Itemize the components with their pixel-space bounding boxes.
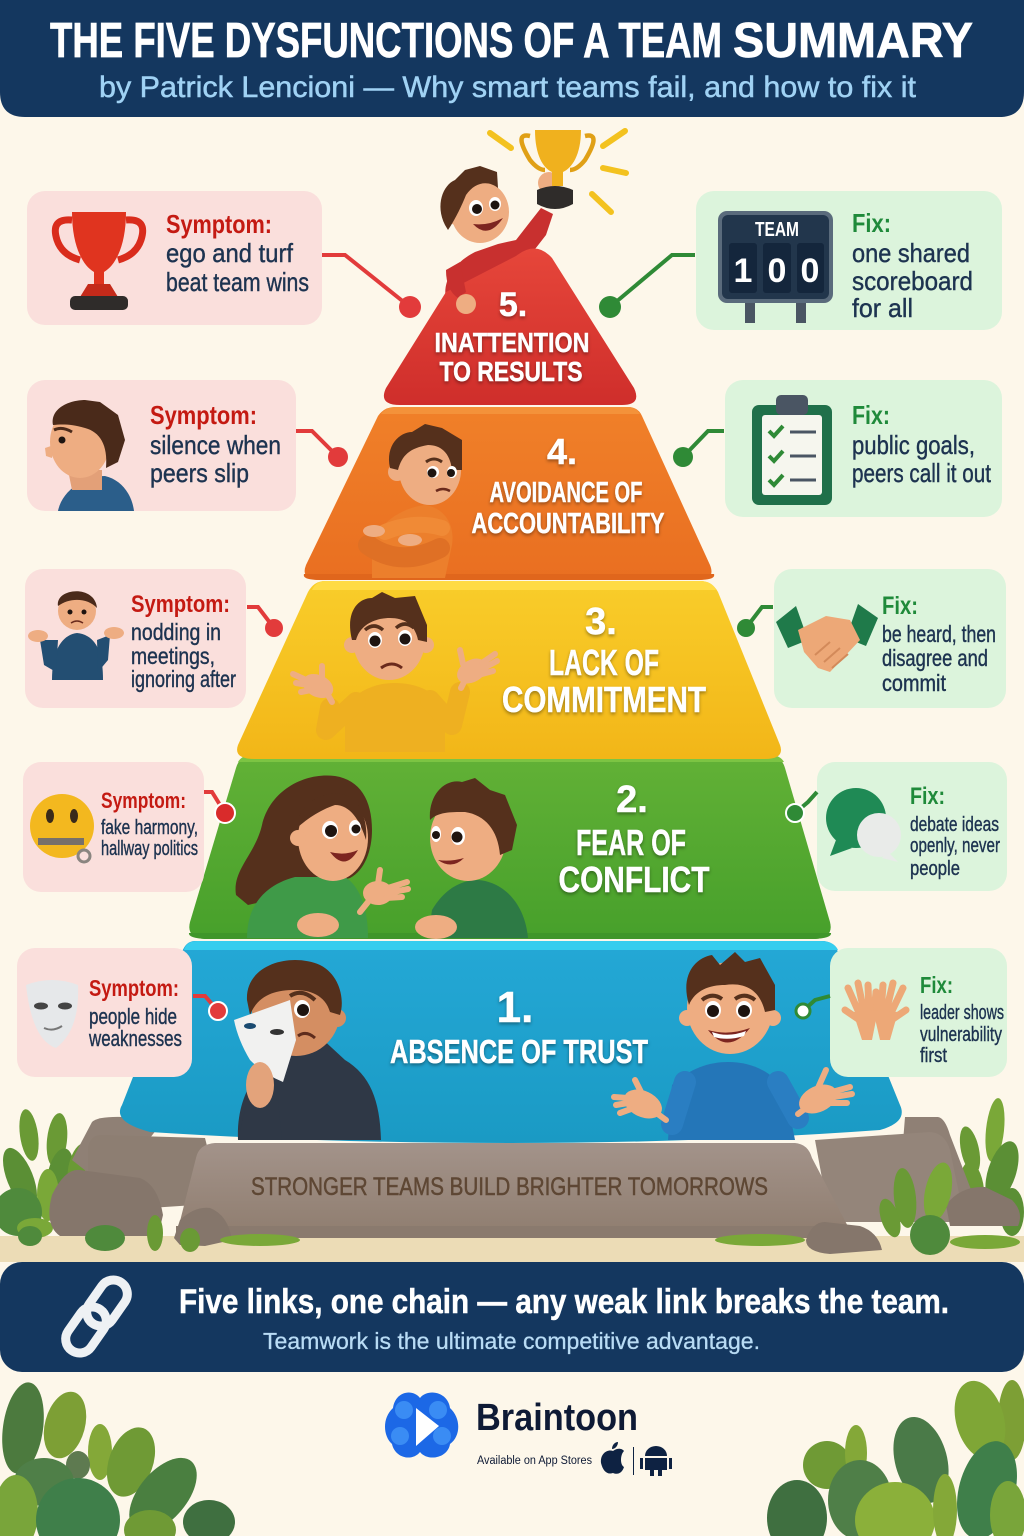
tier 1 label: 1.	[497, 983, 533, 1032]
icon: scoreboard	[718, 211, 833, 323]
pyramid tier 3: lack of commitment	[237, 581, 781, 759]
app stores note: Available on App Stores	[477, 1455, 592, 1467]
character with crossed arms	[363, 424, 462, 578]
symptom text: Symptom:	[150, 400, 257, 430]
ground and background foliage	[0, 1097, 1024, 1262]
symptom text: nodding in	[131, 619, 221, 645]
icon: gold trophy	[490, 130, 626, 212]
connector and dot	[599, 255, 695, 318]
tier 3 label: COMMITMENT	[502, 679, 706, 720]
icon: scoreboard: TEAM	[755, 219, 799, 241]
symptom text: Symptom:	[131, 591, 230, 618]
brand logo	[385, 1393, 672, 1476]
symptom text: Symptom:	[166, 209, 272, 239]
fix text: for all	[852, 293, 913, 323]
icon: scoreboard: 0	[768, 252, 786, 290]
fix text: Fix:	[910, 783, 945, 810]
symptom text: peers slip	[150, 458, 249, 488]
fix text: commit	[882, 670, 947, 696]
confused character shrugging	[293, 592, 497, 752]
icon: handshake	[776, 604, 878, 672]
tier 4 label: 4.	[547, 431, 577, 472]
character holding trophy on top	[440, 130, 626, 314]
tier 1 label	[390, 983, 648, 1070]
tier 4 label: AVOIDANCE OF	[490, 477, 642, 509]
fix text: Fix:	[920, 972, 953, 998]
title: THE FIVE DYSFUNCTIONS OF A TEAM	[50, 14, 722, 68]
fix text: disagree and	[882, 645, 988, 671]
symptom text: beat team wins	[166, 267, 309, 297]
connector and dot	[786, 792, 817, 822]
icon: red trophy	[55, 212, 143, 310]
tier 2 label: FEAR OF	[576, 822, 686, 863]
tier 3 label	[502, 601, 706, 720]
icon: zipper-mouth emoji	[30, 794, 94, 862]
fix text: public goals,	[852, 430, 975, 460]
icon: scoreboard: 1	[734, 252, 752, 290]
icon: apple	[601, 1442, 624, 1474]
icon: chain link	[60, 1274, 133, 1359]
tier 2 label	[558, 779, 710, 900]
character body behind the peak	[445, 208, 553, 300]
fix text: scoreboard	[852, 266, 973, 296]
tier 3 label: 3.	[585, 601, 617, 643]
symptom text: meetings,	[131, 643, 215, 669]
connector and dot	[193, 996, 227, 1020]
symptom text: Symptom:	[101, 788, 186, 813]
icon: scoreboard: 0	[801, 252, 819, 290]
symptom text: Symptom:	[89, 975, 179, 1001]
connector and dot	[247, 607, 283, 637]
tier 5 label: 5.	[499, 286, 527, 324]
fix text: one shared	[852, 238, 970, 268]
symptom text: people hide	[89, 1004, 177, 1029]
icon: shrugging man	[28, 591, 124, 680]
symptom callout: tier 1	[17, 948, 227, 1077]
connector and dot	[796, 996, 830, 1018]
tier 5 label	[434, 286, 590, 387]
pyramid tier 5: inattention to results	[384, 248, 636, 405]
tier 5 label: INATTENTION	[434, 327, 590, 358]
tier 2 label: CONFLICT	[558, 859, 710, 900]
fix text: first	[920, 1045, 947, 1067]
tier 1 label: ABSENCE OF TRUST	[390, 1033, 648, 1070]
fix text: Fix:	[882, 592, 918, 620]
symptom text: ignoring after	[131, 666, 236, 692]
title: SUMMARY	[733, 14, 973, 68]
subtitle: by Patrick Lencioni — Why smart teams fail, and how to fix it	[99, 71, 917, 104]
tier 4 label: ACCOUNTABILITY	[472, 508, 664, 540]
connector and dot	[296, 431, 348, 467]
icon: clipboard checklist	[752, 395, 832, 505]
fix text: Fix:	[852, 400, 890, 430]
fix text: Fix:	[852, 208, 891, 238]
tier 2 label: 2.	[616, 779, 648, 821]
man character	[415, 778, 528, 939]
header banner	[0, 0, 1024, 117]
connector and dot	[322, 255, 421, 318]
fix callout: tier 3	[737, 569, 1006, 708]
icon: white mask	[26, 980, 78, 1048]
fix text: vulnerability	[920, 1024, 1002, 1046]
fix text: people	[910, 858, 960, 880]
connector and dot	[737, 607, 773, 637]
footer banner	[0, 1262, 1024, 1372]
fix text: debate ideas	[910, 814, 999, 836]
foliage: bottom right	[767, 1375, 1024, 1536]
fix callout: tier 5	[599, 191, 1002, 330]
icon: speech bubbles	[826, 788, 901, 862]
woman character	[236, 775, 408, 938]
icon: open hands	[845, 983, 906, 1040]
icon: blue brain play button	[385, 1393, 458, 1458]
symptom text: weaknesses	[88, 1026, 182, 1051]
fix callout: tier 1	[796, 948, 1007, 1077]
symptom text: fake harmony,	[101, 817, 198, 839]
footer subline: Teamwork is the ultimate competitive advantage.	[263, 1328, 760, 1354]
icon: android	[640, 1446, 672, 1476]
symptom callout: tier 2	[23, 762, 235, 892]
tier 5 label: TO RESULTS	[440, 356, 582, 387]
connector and dot	[204, 792, 235, 823]
fix text: peers call it out	[852, 458, 992, 488]
fix callout: tier 4	[673, 380, 1002, 517]
stone base	[49, 1117, 1020, 1254]
icon: man in profile	[45, 400, 134, 511]
tier 3 label: LACK OF	[549, 642, 659, 683]
foliage: bottom left	[0, 1380, 235, 1536]
symptom callout: tier 5	[27, 191, 421, 325]
symptom callout: tier 3	[25, 569, 283, 708]
base inscription: STRONGER TEAMS BUILD BRIGHTER TOMORROWS	[251, 1173, 768, 1201]
symptom text: ego and turf	[166, 238, 294, 268]
tier 4 label	[472, 431, 664, 540]
store divider	[633, 1447, 634, 1475]
pyramid tier 1: absence of trust	[120, 941, 902, 1143]
symptom text: silence when	[150, 430, 281, 460]
symptom callout: tier 4	[27, 380, 348, 511]
smiling character with open arms	[614, 952, 852, 1140]
fix callout: tier 2	[786, 762, 1007, 891]
character hiding behind mask	[234, 960, 381, 1140]
shrubs by the base	[18, 1160, 1020, 1255]
connector and dot	[673, 431, 724, 467]
pyramid tier 4: avoidance of accountability	[304, 407, 714, 580]
symptom text: hallway politics	[101, 838, 198, 860]
pyramid tier 2: fear of conflict	[189, 755, 831, 939]
brand name: Braintoon	[476, 1397, 638, 1439]
